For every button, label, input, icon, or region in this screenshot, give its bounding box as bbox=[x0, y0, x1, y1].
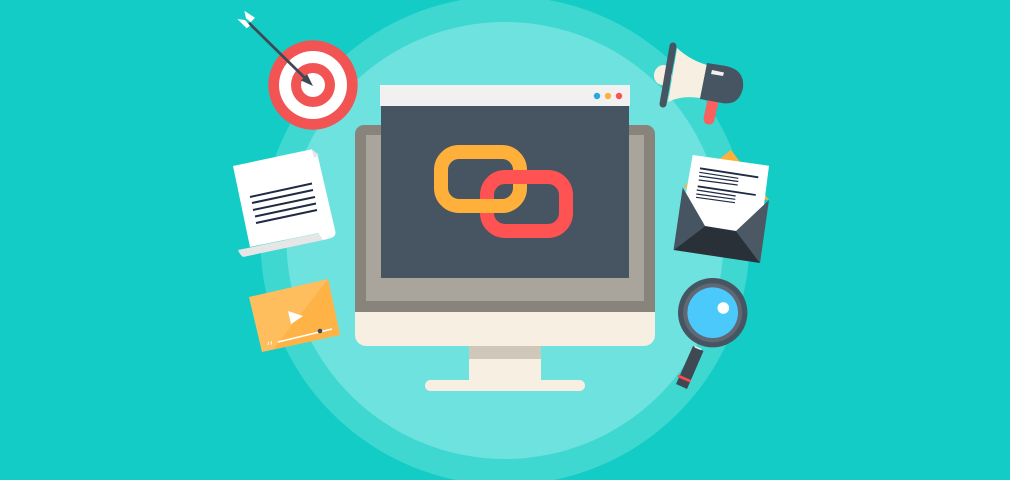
chain link icon bbox=[441, 152, 566, 231]
lens highlight bbox=[718, 302, 729, 314]
handle red band bbox=[678, 374, 691, 382]
envelope back flap bbox=[683, 150, 769, 200]
arrow feathers bbox=[237, 11, 255, 28]
megaphone rim bbox=[663, 46, 673, 104]
computer monitor bbox=[355, 125, 655, 391]
pause control bbox=[268, 342, 272, 345]
megaphone handle bbox=[709, 101, 713, 119]
lens inner rim bbox=[683, 283, 742, 342]
arrow head bbox=[301, 74, 313, 86]
icon: magnifying glass bbox=[676, 278, 747, 389]
monitor chin bbox=[355, 312, 655, 346]
video panel bbox=[249, 279, 340, 352]
megaphone cone bbox=[668, 48, 707, 102]
inner background circle bbox=[286, 22, 724, 459]
icon: envelope with letter bbox=[674, 150, 769, 263]
lens glass bbox=[687, 287, 738, 338]
document corner fold bbox=[312, 149, 319, 158]
letter text lines bbox=[696, 168, 758, 203]
letter sheet bbox=[686, 155, 769, 232]
monitor bezel bbox=[355, 125, 655, 312]
progress knob bbox=[318, 329, 322, 333]
red link overlap bbox=[505, 170, 548, 184]
browser title bar bbox=[380, 85, 630, 106]
yellow link bbox=[441, 152, 520, 206]
play triangle bbox=[288, 311, 303, 324]
document sheet bbox=[233, 149, 336, 247]
document text lines bbox=[250, 184, 317, 223]
monitor base bbox=[425, 380, 585, 391]
icon: video player bbox=[249, 279, 340, 352]
megaphone body bbox=[700, 63, 743, 103]
target rings bbox=[268, 40, 358, 130]
envelope left flap bbox=[674, 188, 705, 250]
browser blue dot bbox=[594, 93, 600, 99]
progress bar bbox=[278, 329, 332, 342]
document roll bbox=[238, 232, 332, 257]
megaphone highlight bbox=[711, 70, 724, 76]
envelope bottom flap bbox=[674, 226, 760, 263]
monitor neck shadow bbox=[469, 346, 541, 359]
lens outer rim bbox=[678, 278, 747, 347]
red link bbox=[487, 177, 566, 231]
icon: megaphone bbox=[652, 46, 743, 119]
browser red dot bbox=[616, 93, 622, 99]
handle collar bbox=[694, 346, 702, 350]
monitor inner panel bbox=[366, 135, 644, 301]
browser orange dot bbox=[605, 93, 611, 99]
browser window bbox=[380, 85, 630, 278]
video panel diagonal shade bbox=[273, 279, 340, 350]
handle bbox=[676, 346, 704, 389]
browser content area bbox=[381, 105, 629, 278]
icon: target with arrow bbox=[237, 11, 358, 130]
icon: paper document bbox=[233, 149, 336, 257]
envelope right flap bbox=[736, 200, 769, 263]
outer background circle bbox=[260, 0, 750, 480]
megaphone back bump bbox=[652, 63, 674, 87]
arrow shaft bbox=[249, 23, 306, 79]
monitor neck bbox=[469, 346, 541, 382]
